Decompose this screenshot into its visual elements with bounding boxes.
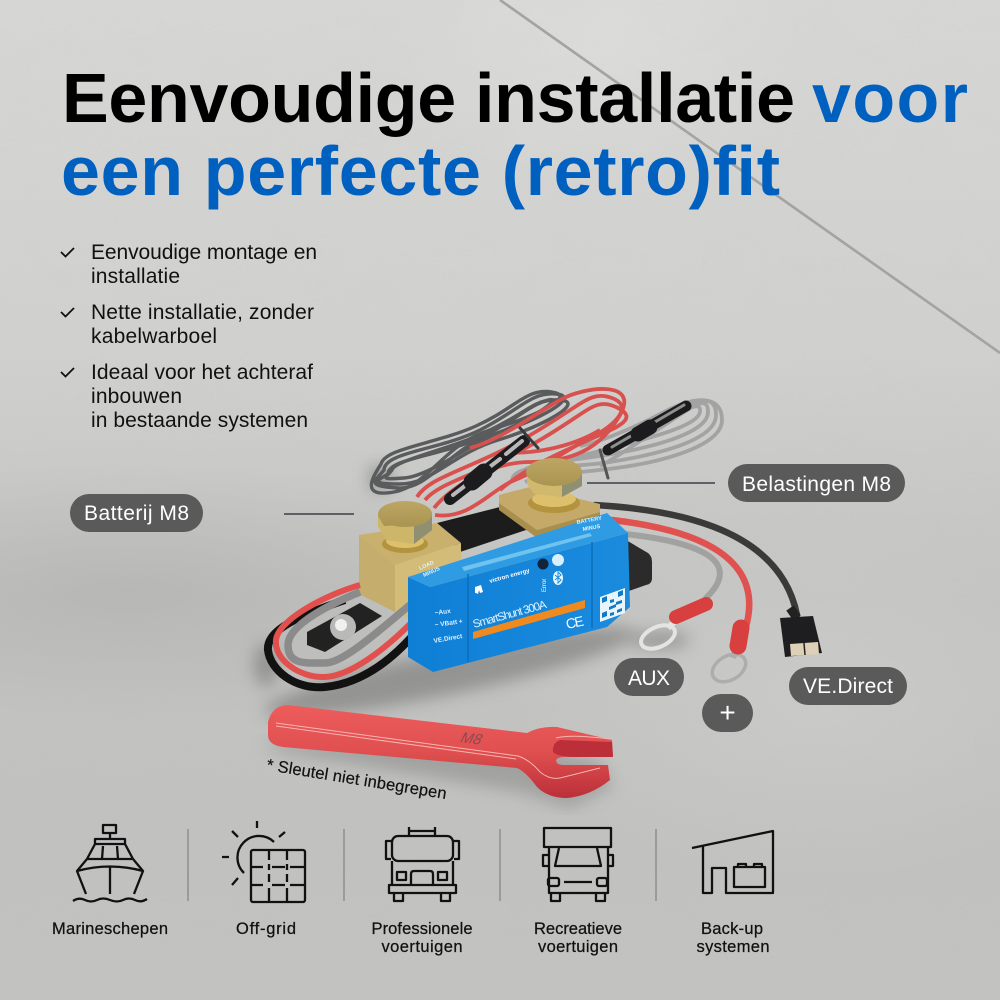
label: Back-up systemen: systemen (696, 938, 770, 956)
bullet 2 text: Nette installatie, zonder (91, 301, 314, 324)
icon: truck (386, 827, 459, 901)
icon: check 2 (61, 308, 74, 316)
bracket with screw (307, 603, 382, 652)
port labels (433, 608, 464, 645)
brass block left (359, 523, 461, 618)
label: Belastingen M8: Belastingen M8 (742, 473, 891, 496)
terminal labels: MINUS (422, 566, 441, 579)
VE.Direct connector (780, 608, 822, 657)
right output wires (595, 505, 797, 630)
terminal labels: BATTERY (576, 516, 603, 526)
brass block right (499, 487, 600, 540)
icon: solar panel (222, 821, 305, 902)
label: Off-grid: Off-grid (236, 920, 296, 938)
terminal labels: MINUS (582, 524, 601, 533)
device shadows (254, 464, 690, 733)
bullet 3 text: in bestaande systemen (91, 409, 308, 432)
label: Professionele voertuigen (372, 920, 472, 956)
footnote: * Sleutel niet inbegrepen (265, 756, 448, 803)
bullet 1 text: installatie (91, 265, 180, 288)
error LED (538, 558, 548, 592)
icon: ship (73, 825, 147, 902)
AUX ring terminal (637, 604, 706, 653)
brand: victron energy (489, 568, 531, 585)
icon: camper (543, 828, 613, 901)
bullet 3 text (91, 361, 313, 432)
label: AUX (614, 658, 684, 696)
label: Marineschepen: Marineschepen (52, 920, 168, 938)
bullet 1 text: Eenvoudige montage en (91, 241, 317, 264)
label: Belastingen M8 (728, 464, 905, 502)
title: voor (812, 59, 968, 137)
blue shunt housing (408, 513, 630, 672)
fuse holder right (600, 405, 686, 478)
label: VE.Direct (789, 667, 907, 705)
title (61, 59, 968, 210)
port labels: VE.Direct (433, 633, 464, 645)
error LED: Error (542, 579, 548, 592)
dividers (188, 829, 656, 901)
wrench size marking: M8 (457, 730, 486, 748)
bolt right (526, 458, 582, 513)
bullet 1 text (91, 241, 317, 288)
label: Back-up systemen (696, 920, 770, 956)
label: Recreatieve voertuigen: Recreatieve (534, 920, 622, 938)
label: plus (702, 694, 753, 732)
busbar (437, 507, 532, 552)
terminal labels: LOAD (418, 560, 435, 572)
plus ring terminal (707, 628, 751, 687)
bullet 3 text: inbouwen (91, 385, 182, 408)
label: Back-up systemen: Back-up (701, 920, 763, 938)
label: VE.Direct: VE.Direct (803, 675, 893, 698)
orange stripe (473, 600, 585, 639)
title: Eenvoudige installatie (62, 59, 795, 137)
product name: SmartShunt 300A (472, 599, 548, 631)
label: Professionele voertuigen: voertuigen (382, 938, 462, 956)
title: een perfecte (retro)fit (61, 132, 780, 210)
terminal labels (418, 516, 603, 579)
left looped wires (268, 585, 416, 687)
wrench (262, 705, 613, 808)
label: Batterij M8: Batterij M8 (84, 502, 189, 525)
grey coiled wire (512, 400, 722, 482)
bullet 2 text (91, 301, 314, 348)
callout line: Belastingen (587, 482, 715, 484)
housing top face (408, 513, 628, 587)
bolt left (378, 501, 432, 553)
label: Professionele voertuigen: Professionele (372, 920, 472, 938)
port labels: ~ VBatt + (434, 618, 463, 629)
icon: garage with battery (692, 831, 773, 893)
checklist (61, 241, 317, 432)
product: SmartShunt with cables (254, 389, 822, 733)
rear black plate (626, 540, 652, 592)
fuse holder left (450, 428, 538, 499)
red coiled wire (417, 389, 626, 516)
callout line: Batterij (284, 513, 354, 515)
label: AUX: AUX (628, 667, 670, 690)
dark grey coiled wire (371, 391, 568, 493)
label: Recreatieve voertuigen: voertuigen (538, 938, 618, 956)
QR code (600, 588, 625, 622)
icon: check 3 (61, 368, 74, 376)
label: plus: + (719, 697, 736, 728)
bullet 2 text: kabelwarboel (91, 325, 217, 348)
label: Batterij M8 (70, 494, 203, 532)
bullet 3 text: Ideaal voor het achteraf (91, 361, 313, 384)
port labels: ~Aux (434, 608, 452, 617)
bluetooth LED (552, 554, 564, 585)
icon: check 1 (61, 248, 74, 256)
CE mark: CE (564, 613, 585, 632)
label: Recreatieve voertuigen (534, 920, 622, 956)
